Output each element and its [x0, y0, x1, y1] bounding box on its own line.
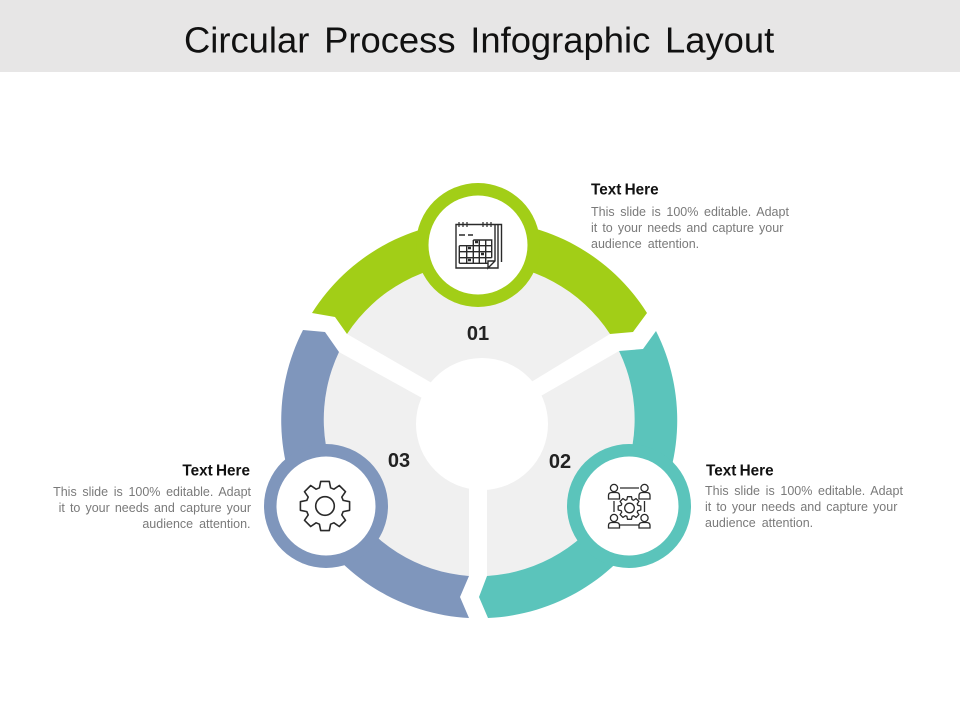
icon: calendar — [456, 222, 502, 268]
number 02: 02 — [549, 451, 571, 473]
text block: top right: audience attention. — [591, 237, 699, 251]
text block: top right: Text Here — [591, 182, 659, 198]
text block: bottom left: audience attention. — [142, 517, 250, 531]
icon: gear — [300, 481, 350, 531]
segment: right grey sector — [487, 351, 635, 576]
text block: bottom right: Text Here — [706, 462, 774, 480]
text block: bottom left: it to your needs and capture your — [59, 501, 251, 515]
text block: bottom left: This slide is 100% editable. Adapt — [53, 485, 252, 499]
text block: bottom right: This slide is 100% editable. Adapt — [705, 484, 903, 498]
text block: bottom right: audience attention. — [705, 516, 813, 530]
circular diagram — [264, 183, 691, 618]
arc: teal — [479, 331, 677, 618]
node: teal circle — [567, 444, 691, 568]
number 03: 03 — [388, 450, 410, 472]
number 01: 01 — [467, 323, 489, 345]
text block: bottom right — [705, 462, 903, 530]
node: green circle — [416, 183, 540, 307]
text block: bottom left: Text Here — [182, 462, 250, 480]
text block: top right: This slide is 100% editable. Adapt — [591, 205, 789, 219]
arc: green — [312, 221, 647, 334]
title bar — [0, 0, 960, 72]
centre white circle — [416, 358, 548, 490]
text block: top right — [591, 182, 789, 251]
title bar: Circular Process Infographic Layout — [184, 20, 774, 60]
text block: top right: it to your needs and capture your — [591, 221, 783, 235]
node: blue circle — [264, 444, 388, 568]
segment: top grey sector — [347, 263, 610, 412]
text block: bottom right: it to your needs and capture your — [705, 500, 897, 514]
arc: blue — [281, 330, 469, 618]
icon: people and gear network — [608, 484, 650, 528]
text block: bottom left — [53, 462, 252, 531]
segment: left grey sector — [324, 352, 469, 576]
